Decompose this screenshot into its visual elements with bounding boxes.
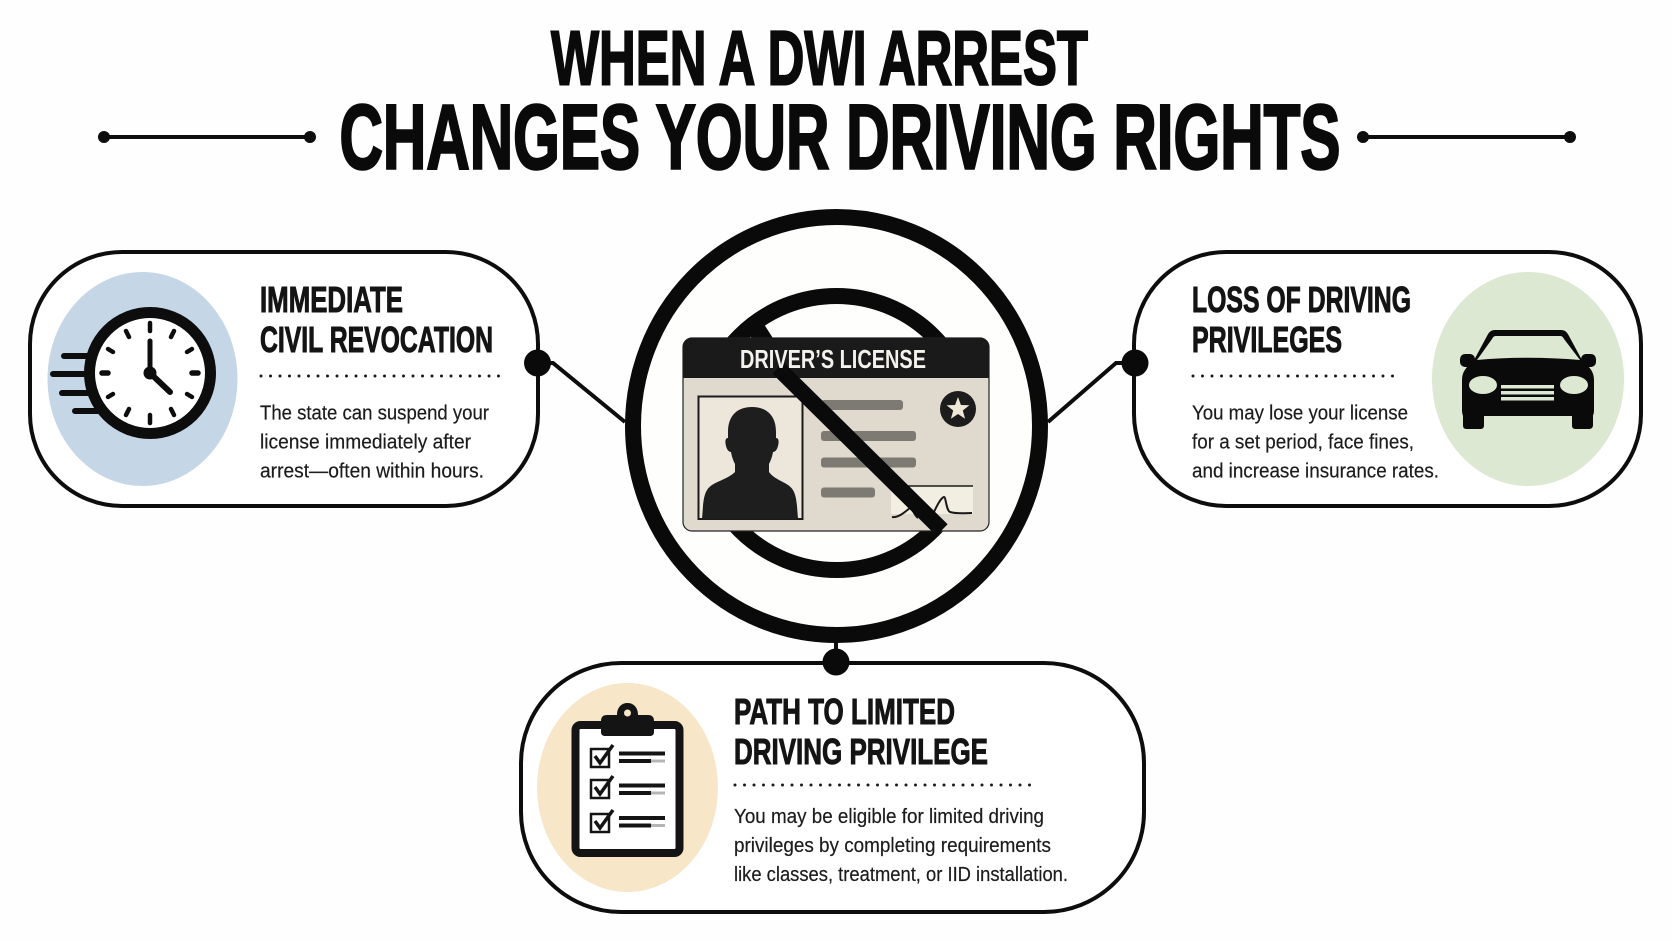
central emblem: prohibited driver's license bbox=[633, 217, 1040, 635]
connector: right panel to center bbox=[1048, 363, 1135, 422]
signature box bbox=[891, 486, 973, 520]
body text: license immediately after bbox=[260, 432, 471, 454]
heading: IMMEDIATE bbox=[260, 279, 403, 320]
body text: You may lose your license bbox=[1192, 402, 1408, 424]
body text: for a set period, face fines, bbox=[1192, 432, 1414, 454]
outer ring bbox=[633, 217, 1040, 635]
connector: left panel to center bbox=[537, 363, 625, 422]
node: bottom panel bbox=[822, 648, 850, 676]
panel: loss of driving privileges bbox=[1134, 252, 1641, 506]
body text bbox=[260, 402, 489, 482]
icon background: blue circle bbox=[48, 272, 238, 486]
body text: like classes, treatment, or IID installation. bbox=[734, 864, 1068, 886]
prohibition slash: across card bbox=[778, 368, 942, 530]
heading: CIVIL REVOCATION bbox=[260, 319, 493, 360]
title: WHEN A DWI ARREST bbox=[551, 16, 1088, 102]
star badge bbox=[940, 391, 976, 427]
body text: privileges by completing requirements bbox=[734, 835, 1051, 857]
heading: DRIVING PRIVILEGE bbox=[734, 731, 988, 772]
heading bbox=[734, 691, 988, 772]
heading bbox=[260, 279, 493, 360]
prohibition slash: upper stub bbox=[752, 322, 787, 377]
body text bbox=[1192, 402, 1439, 482]
card header label: DRIVER’S LICENSE bbox=[740, 344, 926, 374]
heading: PATH TO LIMITED bbox=[734, 691, 955, 732]
dotted divider bbox=[1193, 374, 1396, 378]
left title rule bbox=[98, 131, 316, 143]
panel: path to limited driving privilege bbox=[521, 663, 1144, 912]
card header bbox=[683, 338, 989, 378]
body text: The state can suspend your bbox=[260, 402, 489, 424]
prohibition ring bbox=[700, 296, 974, 570]
license card bbox=[683, 338, 989, 531]
data bars bbox=[821, 400, 916, 498]
body text: You may be eligible for limited driving bbox=[734, 806, 1044, 828]
heading bbox=[1192, 279, 1411, 360]
icon: clock with speed lines bbox=[53, 312, 210, 434]
node: left panel bbox=[524, 350, 551, 376]
right title rule bbox=[1357, 131, 1576, 143]
icon: clipboard checklist bbox=[576, 703, 680, 853]
body text bbox=[734, 806, 1068, 886]
icon background: cream circle bbox=[537, 683, 718, 892]
icon: car bbox=[1460, 330, 1596, 429]
dotted divider bbox=[735, 784, 1031, 786]
photo frame and silhouette bbox=[698, 396, 802, 519]
title bbox=[340, 16, 1340, 188]
heading: PRIVILEGES bbox=[1192, 319, 1342, 360]
body text: arrest—often within hours. bbox=[260, 460, 484, 482]
body text: and increase insurance rates. bbox=[1192, 460, 1439, 482]
panel: immediate civil revocation bbox=[30, 252, 538, 506]
connector: center to bottom panel bbox=[834, 640, 838, 662]
icon background: green circle bbox=[1432, 272, 1624, 486]
dotted divider bbox=[261, 374, 501, 378]
node: right panel bbox=[1122, 350, 1148, 376]
heading: LOSS OF DRIVING bbox=[1192, 279, 1411, 320]
